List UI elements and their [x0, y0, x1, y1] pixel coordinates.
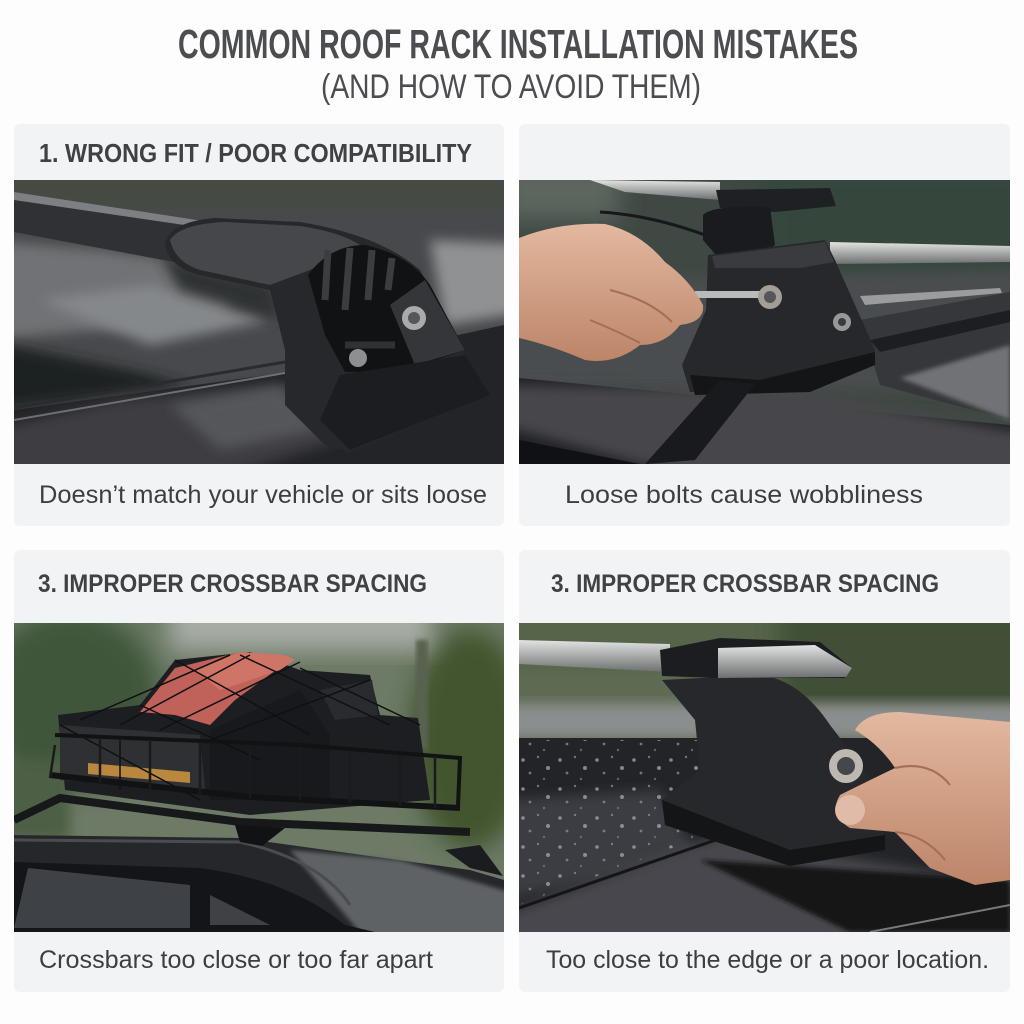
- photo: ill-fitting rack foot on wet roof: [14, 180, 504, 464]
- cargo net: [60, 655, 420, 800]
- bracket: [165, 218, 424, 445]
- strap: [645, 394, 748, 464]
- panel: crossbar spacing, basket: [0, 550, 530, 992]
- water droplets: [521, 740, 698, 904]
- silver crossbars: [590, 180, 720, 200]
- bracket: [716, 188, 836, 212]
- crossbars and feet: [14, 798, 470, 832]
- caption: wrong fit: Doesn’t match your vehicle or sits loose: [39, 481, 487, 509]
- caption: placement: Too close to the edge or a poor location.: [546, 946, 989, 974]
- car: [14, 835, 504, 932]
- bag: [58, 652, 430, 815]
- panel: loose bolts: [500, 124, 1024, 526]
- hand: [836, 712, 1010, 885]
- subtitle: (AND HOW TO AVOID THEM): [321, 68, 701, 106]
- photo: hand tightening bolt: [519, 180, 1010, 464]
- silver crossbar: [519, 640, 670, 672]
- panel: crossbar spacing, placement: [500, 550, 1024, 992]
- basket frame: [55, 735, 460, 806]
- photo: foot placed near roof edge: [519, 623, 1010, 932]
- heading: wrong fit: 1. WRONG FIT / POOR COMPATIBILITY: [39, 138, 472, 168]
- crossbar: [14, 200, 183, 262]
- caption: loose bolts: Loose bolts cause wobbliness: [565, 481, 923, 509]
- screwdriver: [695, 291, 765, 298]
- photo: overloaded roof basket: [14, 623, 504, 932]
- hand: [519, 224, 703, 361]
- heading: crossbar spacing right: 3. IMPROPER CROSSBAR SPACING: [551, 570, 939, 598]
- title: [178, 21, 858, 106]
- bracket: [662, 678, 840, 860]
- heading: crossbar spacing left: 3. IMPROPER CROSSBAR SPACING: [38, 570, 427, 598]
- caption: spacing left: Crossbars too close or too far apart: [39, 946, 433, 974]
- panel: wrong fit: [0, 124, 540, 526]
